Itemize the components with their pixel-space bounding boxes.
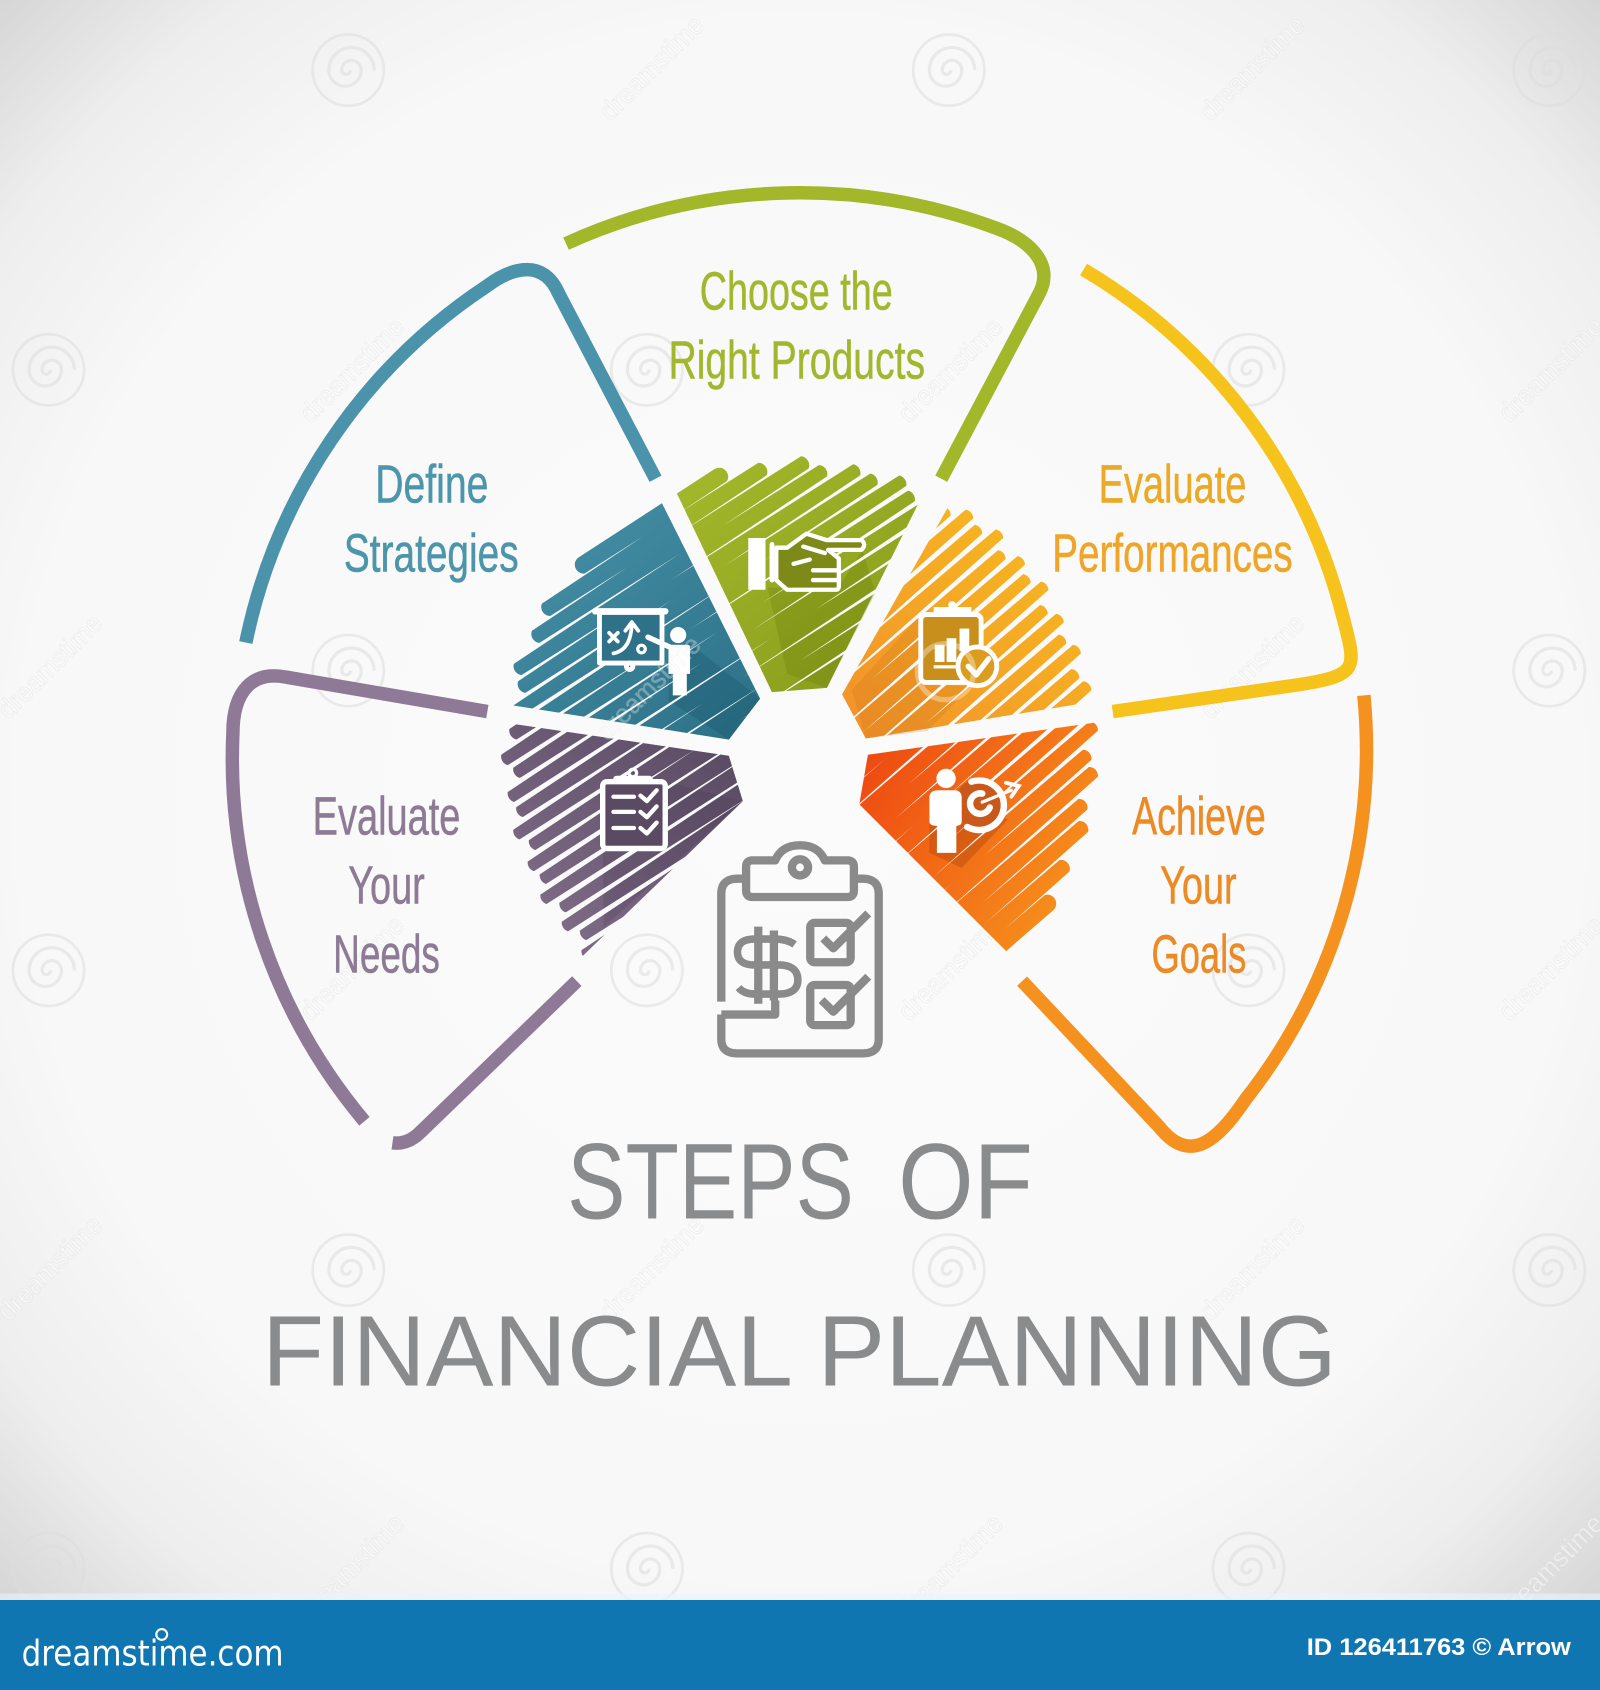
icon: person with target xyxy=(929,769,1019,853)
panel: evaluate your needs xyxy=(232,676,743,1143)
scribble wedge: yellow xyxy=(842,508,1092,738)
label: choose the right products: Choose the xyxy=(700,261,893,321)
label: evaluate your needs: Evaluate xyxy=(313,786,460,846)
label: achieve your goals: Goals xyxy=(1151,924,1246,984)
panel: evaluate performances xyxy=(842,270,1351,739)
label: evaluate performances: Performances xyxy=(1052,523,1293,583)
scribble wedge: green xyxy=(677,456,918,692)
outline: green segment xyxy=(566,193,1044,479)
panel: achieve your goals xyxy=(859,695,1366,1146)
label: achieve your goals xyxy=(1132,786,1266,984)
label: choose the right products: Right Products xyxy=(668,330,925,390)
footer brand: dreamstime.com xyxy=(22,1634,284,1675)
label: define strategies: Strategies xyxy=(344,523,519,583)
scribble wedge: purple xyxy=(501,724,743,956)
label: define strategies xyxy=(344,454,519,583)
label: achieve your goals: Achieve xyxy=(1132,786,1266,846)
footer logo spiral xyxy=(156,1629,167,1640)
label: evaluate performances: Evaluate xyxy=(1099,454,1246,514)
outline: purple lower stroke xyxy=(392,981,577,1143)
outline: purple segment xyxy=(232,676,487,1121)
icon: checklist clipboard xyxy=(603,769,665,849)
outline: yellow segment xyxy=(1084,270,1351,712)
icon: performance report xyxy=(921,601,997,686)
label: evaluate your needs xyxy=(313,786,460,984)
icon: presenter at strategy board xyxy=(595,611,690,695)
title: STEPS xyxy=(567,1120,854,1241)
scribble wedge: orange xyxy=(860,722,1098,952)
watermark spirals over the wheel xyxy=(590,630,974,746)
footer image id: ID 126411763 © Arrow xyxy=(1307,1635,1571,1661)
outline: orange segment xyxy=(1022,695,1366,1146)
footer bar xyxy=(0,1594,1600,1690)
label: define strategies: Define xyxy=(375,454,488,514)
label: choose the right products xyxy=(668,261,925,390)
label: evaluate your needs: Your xyxy=(348,855,425,915)
scribble wedge: blue xyxy=(513,503,760,740)
panel: choose the right products xyxy=(566,193,1044,692)
title: FINANCIAL PLANNING xyxy=(262,1295,1337,1407)
icon: pointing hand xyxy=(748,534,864,590)
label: evaluate your needs: Needs xyxy=(333,924,440,984)
label: evaluate performances xyxy=(1052,454,1293,583)
title: OF xyxy=(898,1120,1033,1241)
icon: financial plan clipboard xyxy=(721,845,879,1053)
panel: define strategies xyxy=(246,270,760,740)
outline: blue segment xyxy=(246,270,656,643)
title xyxy=(262,1120,1337,1407)
label: achieve your goals: Your xyxy=(1160,855,1237,915)
